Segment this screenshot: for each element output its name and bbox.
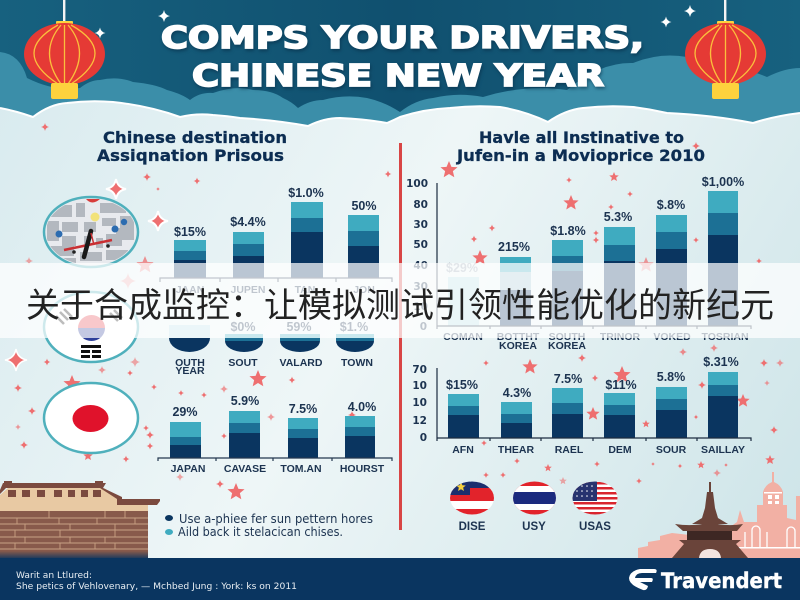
translucent caption band: [0, 263, 800, 338]
chart: left row 1: TAN: [295, 284, 315, 296]
chart: right top: 215%: [498, 240, 530, 254]
chart: right top: 30: [413, 219, 428, 231]
chart: left row 1: $4.4%: [230, 215, 266, 229]
chart: right top: KOREA: [499, 340, 537, 352]
chart: left row 2: [169, 320, 374, 377]
chart: left row 1: [160, 186, 392, 296]
chart: left row 1: JON: [353, 284, 375, 296]
chart: right bottom: $11%: [605, 378, 637, 392]
chart: left row 3: 7.5%: [289, 402, 317, 416]
chart: left row 3: JAPAN: [171, 463, 205, 475]
legend: Aild back it stelacican chises.: [178, 525, 343, 539]
logo: Travendert: [661, 569, 782, 593]
chart: right top: BOTTHT: [497, 331, 540, 343]
chart: right top: KOREA: [548, 340, 586, 352]
left panel heading: Assiqnation Prisous: [97, 146, 284, 165]
chart: right top: $1,00%: [702, 175, 744, 189]
legend: Use a-phiee fer sun pettern hores: [179, 512, 373, 526]
footer text: She petics of Vehlovenary, — Mchbed Jung : York: ks on 2011: [16, 582, 297, 592]
chart: left row 1: $15%: [174, 225, 206, 239]
chart: right bottom: 10: [412, 380, 427, 392]
caption text: 关于合成监控：让模拟测试引领性能优化的新纪元: [26, 287, 774, 325]
icon: Malaysia-style flag: [450, 481, 494, 515]
chart: left row 1: 50%: [351, 199, 377, 213]
header banner: [0, 0, 800, 140]
left panel heading: Chinese destination: [103, 128, 287, 147]
chart: right top: 100: [406, 178, 428, 190]
chart: left row 3: 4.0%: [348, 400, 376, 414]
chart: right top: 30: [413, 281, 428, 293]
chart: left row 2: SOUT: [228, 357, 258, 369]
chart: right top: 50: [413, 239, 428, 251]
chart: left row 3: [158, 394, 392, 475]
chart: right top: 40: [413, 260, 428, 272]
decorative scattered stars: [5, 123, 784, 499]
left panel heading: [97, 128, 287, 165]
footer text: [16, 571, 297, 592]
sparkle stars in header: [94, 5, 696, 38]
chart: right top: $1.8%: [550, 224, 586, 238]
title: [161, 21, 644, 94]
chart: right bottom: 7.5%: [554, 372, 582, 386]
title: CHINESE NEW YEAR: [192, 59, 604, 94]
chart: right bottom: AFN: [452, 444, 474, 456]
chart: right top: TOSRIAN: [701, 331, 749, 343]
right panel heading: Havle all Instinative to: [479, 128, 684, 147]
chart: right top: VOKED: [653, 331, 691, 343]
chart: right bottom: RAEL: [555, 444, 584, 456]
plane: [64, 231, 112, 257]
chart: right top: $29%: [446, 261, 478, 275]
chart: left row 3: CAVASE: [224, 463, 266, 475]
chart: right top: 80: [413, 199, 428, 211]
icon: USA flag: [572, 481, 618, 515]
icon: Japan flag: [44, 383, 138, 453]
chart: right top: 5.3%: [604, 210, 632, 224]
chart: right top: 0: [420, 321, 427, 333]
chart: left row 3: 5.9%: [231, 394, 259, 408]
left lantern: [24, 0, 105, 99]
chart: right bottom: 0: [420, 432, 427, 444]
chart: right bottom: 10: [412, 397, 427, 409]
right panel heading: [456, 128, 705, 165]
legend: [165, 512, 373, 539]
white cloud edge: [0, 101, 800, 140]
chart: left row 3: 29%: [172, 405, 198, 419]
chart: right top: COMAN: [443, 331, 483, 343]
right panel heading: Jufen-in a Movioprice 2010: [456, 146, 705, 165]
back clouds: [0, 52, 800, 130]
red divider: [399, 143, 402, 530]
chart: right top: 10: [413, 301, 428, 313]
chart: right bottom: DEM: [608, 444, 632, 456]
chart: right bottom: SAILLAY: [701, 444, 745, 456]
right lantern: [685, 0, 766, 99]
chart: left row 2: $0%: [230, 320, 256, 334]
palace skyline illustration: [638, 472, 800, 558]
flag labels: DISE: [459, 521, 486, 533]
chart: right bottom: 12: [412, 415, 427, 427]
icon: Thailand flag: [513, 481, 557, 515]
chart: right bottom: SOUR: [656, 444, 687, 456]
chart: right top: TRINOR: [600, 331, 641, 343]
icon: Korea flag: [44, 292, 138, 362]
icon: map with plane: [44, 197, 138, 267]
chart: right bottom: [412, 355, 751, 456]
chart: left row 2: TOWN: [341, 357, 373, 369]
chart: left row 3: TOM.AN: [280, 463, 322, 475]
palace wall illustration: [0, 481, 160, 558]
chart: left row 2: $1.%: [340, 320, 368, 334]
chart: left row 1: JUPEN: [230, 284, 266, 296]
chart: left row 1: JAAN: [176, 284, 204, 296]
footer bar: [0, 558, 800, 600]
chart: right top: [406, 175, 751, 352]
flag labels: USY: [522, 521, 546, 533]
chart: right top: SOUTH: [549, 331, 585, 343]
chart: right bottom: 70: [412, 364, 427, 376]
pagoda illustration: [672, 482, 748, 558]
chart: left row 2: VALARD: [280, 357, 323, 369]
chart: left row 2: 59%: [286, 320, 312, 334]
cloud outline: [0, 101, 800, 126]
chart: right bottom: $.31%: [703, 355, 739, 369]
chart: left row 3: HOURST: [340, 463, 385, 475]
flag labels: USAS: [579, 521, 611, 533]
chart: right bottom: $15%: [446, 378, 478, 392]
chart: right bottom: 4.3%: [503, 386, 531, 400]
chart: right bottom: 5.8%: [657, 370, 685, 384]
chart: left row 2: OUTH: [175, 357, 205, 369]
chart: left row 1: $1.0%: [288, 186, 324, 200]
chart: right bottom: THEAR: [498, 444, 534, 456]
footer text: Warit an Ltlured:: [16, 571, 92, 581]
chart: left row 2: YEAR: [175, 365, 205, 377]
flag labels: [459, 521, 611, 533]
title: COMPS YOUR DRIVERS,: [161, 21, 644, 56]
chart: right top: $.8%: [657, 198, 685, 212]
body background: [0, 100, 800, 560]
